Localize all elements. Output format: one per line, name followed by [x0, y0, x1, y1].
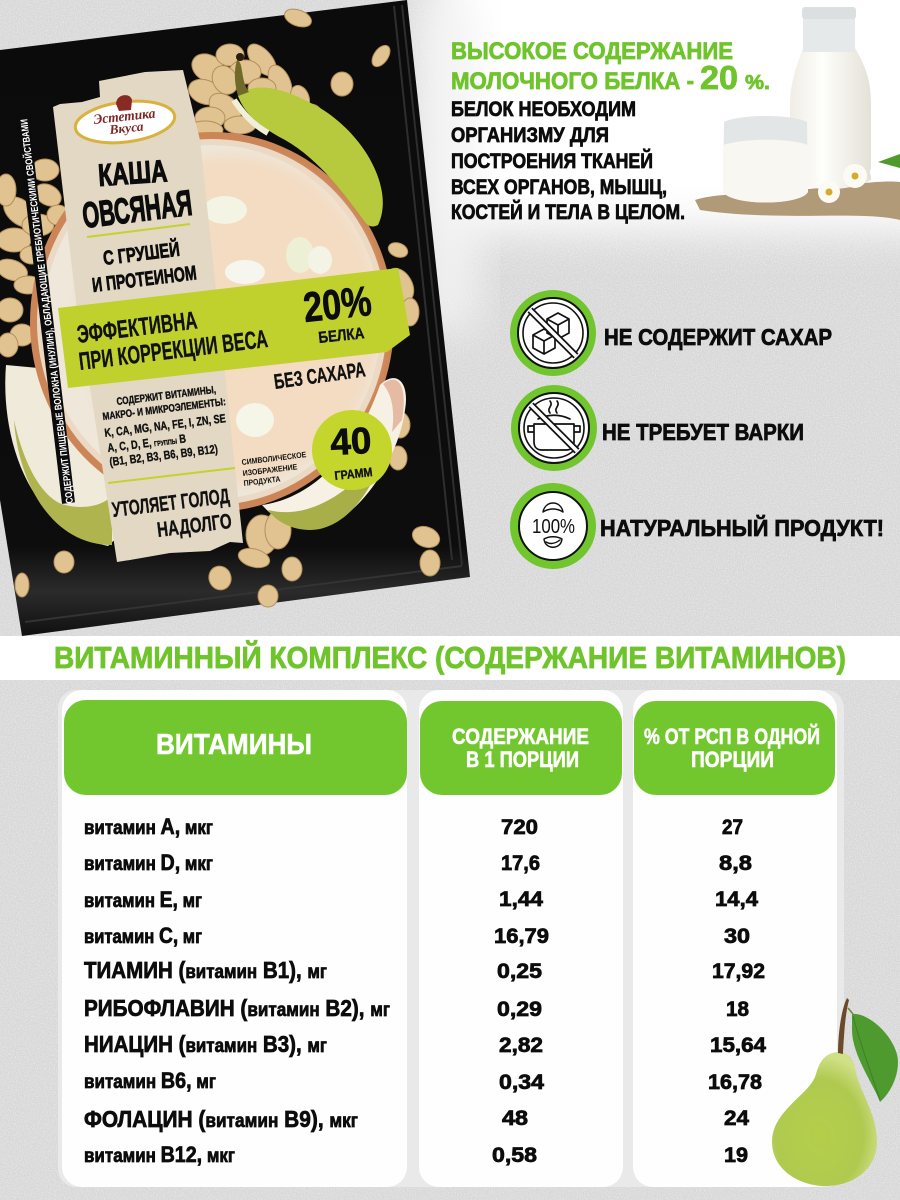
brand logo: Вкуса [108, 118, 145, 137]
percent of daily value values: 17,92 [712, 960, 765, 983]
protein body text: ОРГАНИЗМУ ДЛЯ [451, 124, 609, 147]
product name: И ПРОТЕИНОМ [91, 262, 198, 297]
header: amount per serving: СОДЕРЖАНИЕ [452, 724, 589, 749]
burlap [695, 182, 900, 220]
protein heading: ВЫСОКОЕ СОДЕРЖАНИЕ [451, 38, 733, 65]
pear slices [234, 53, 406, 530]
amount per serving values: 1,44 [499, 888, 543, 911]
header: amount per serving [420, 701, 622, 795]
vitamin names column: РИБОФЛАВИН (витамин В2), мг [84, 995, 390, 1021]
amount per serving values: 16,79 [494, 925, 549, 948]
feature labels: НАТУРАЛЬНЫЙ ПРОДУКТ! [600, 514, 884, 541]
oat pack product photo [0, 0, 470, 636]
vitamins note on pack: A, C, D, E, ГРУППЫ B [107, 431, 187, 455]
vitamin names column: ТИАМИН (витамин В1), мг [84, 957, 327, 983]
symbolic image note [242, 452, 306, 486]
brand logo [73, 95, 177, 148]
left pear slice [5, 365, 125, 546]
vitamin names column: НИАЦИН (витамин В3), мг [84, 1031, 327, 1057]
vitamins note on pack: (B1, B2, B3, B6, B9, B12) [109, 442, 219, 469]
product name [82, 160, 197, 292]
protein heading: МОЛОЧНОГО БЕЛКА - [451, 68, 694, 95]
weight badge [312, 410, 392, 490]
percent of daily value values: 18 [726, 998, 749, 1021]
percent of daily value values: 19 [724, 1144, 748, 1167]
vitamin names column: витамин D, мкг [84, 850, 213, 875]
bowl with porridge [30, 132, 394, 512]
brand logo: Эстетика [93, 107, 156, 128]
vitamin names column: ФОЛАЦИН (витамин В9), мкг [84, 1106, 358, 1132]
amount per serving values: 0,58 [492, 1144, 537, 1167]
protein body text: ПОСТРОЕНИЯ ТКАНЕЙ [451, 149, 653, 173]
table backing [58, 690, 844, 1187]
vitamin names column: витамин Е, мг [84, 887, 202, 912]
vitamin table [58, 690, 844, 1187]
symbolic image note: ИЗОБРАЖЕНИЕ [242, 462, 298, 478]
amount per serving values: 48 [502, 1107, 528, 1130]
symbolic image note: ПРОДУКТА [243, 475, 281, 488]
icon: no sugar [510, 290, 596, 376]
icon: 100 percent natural: 100% [532, 516, 575, 538]
flowers and leaf [818, 154, 900, 203]
scattered oat flakes [15, 6, 443, 607]
product name: С ГРУШЕЙ [102, 237, 181, 270]
milk photo [695, 7, 900, 220]
feature labels: НЕ ТРЕБУЕТ ВАРКИ [602, 419, 804, 445]
product name: КАША [97, 153, 168, 193]
vitamins note on pack: K, CA, MG, NA, FE, I, ZN, SE [104, 411, 226, 440]
vitamin names column: витамин С, мг [84, 923, 202, 948]
vitamin names column: витамин В6, мг [84, 1068, 216, 1093]
amount per serving values: 720 [501, 816, 538, 839]
symbolic image note: СИМВОЛИЧЕСКОЕ [241, 450, 307, 467]
vertical pack text: СОДЕРЖИТ ПИЩЕВЫЕ ВОЛОКНА (ИНУЛИН), ОБЛАДАЮЩИЕ ПРЕБИОТИЧЕСКИМИ СВОЙСТВАМИ [17, 118, 76, 504]
header: vitamins [64, 700, 407, 795]
percent of daily value values: 14,4 [715, 888, 758, 911]
percent of daily value values: 30 [724, 925, 750, 948]
protein heading: 20 [700, 59, 738, 96]
header: percent of daily value: ПОРЦИИ [691, 747, 774, 772]
protein heading [451, 38, 770, 96]
header: percent of daily value [634, 701, 835, 795]
beige label [53, 70, 243, 562]
vitamins note on pack: МАКРО- И МИКРОЭЛЕМЕНТЫ: [102, 396, 226, 423]
protein body text [451, 98, 685, 224]
pear photo [772, 998, 898, 1186]
lime claim band [58, 268, 410, 388]
percent of daily value values: 27 [722, 816, 743, 839]
percent of daily value values: 8,8 [719, 852, 752, 875]
milk bottle [790, 7, 871, 189]
lime claim band: ЭФФЕКТИВНА [75, 306, 199, 349]
protein heading: %. [745, 72, 770, 94]
header: vitamins: ВИТАМИНЫ [156, 729, 312, 761]
percent of daily value values: 15,64 [710, 1034, 766, 1057]
vitamin names column: витамин А, мкг [84, 814, 213, 839]
icon: no cooking [511, 385, 597, 471]
no sugar note: БЕЗ САХАРА [272, 358, 367, 394]
amount per serving values: 2,82 [499, 1034, 543, 1057]
satiety claim: НАДОЛГО [156, 510, 233, 542]
header: percent of daily value: % ОТ РСП В ОДНОЙ [644, 724, 820, 749]
vitamins note on pack: СОДЕРЖИТ ВИТАМИНЫ, [116, 384, 217, 408]
header: amount per serving: В 1 ПОРЦИИ [466, 747, 579, 772]
lime claim band: ПРИ КОРРЕКЦИИ ВЕСА [77, 325, 269, 376]
weight badge: ГРАММ [334, 465, 373, 483]
oat flakes cluster behind bowl [0, 39, 419, 571]
vitamin names column [84, 814, 390, 1167]
amount per serving values: 0,29 [497, 998, 542, 1021]
vitamin names column: витамин В12, мкг [84, 1142, 235, 1167]
percent of daily value values: 24 [724, 1107, 749, 1130]
weight badge: 40 [329, 420, 372, 463]
percent of daily value values: 16,78 [708, 1071, 762, 1094]
satiety claim [111, 488, 232, 539]
amount per serving values: 0,25 [497, 960, 542, 983]
amount per serving values [492, 816, 549, 1167]
icon: 100 percent natural [510, 483, 596, 569]
lime claim band: БЕЛКА [318, 325, 366, 347]
pack body [0, 0, 470, 636]
satiety claim: УТОЛЯЕТ ГОЛОД [111, 485, 231, 522]
vitamins note on pack [102, 384, 235, 483]
protein body text: КОСТЕЙ И ТЕЛА В ЦЕЛОМ. [451, 200, 685, 224]
feature labels: НЕ СОДЕРЖИТ САХАР [604, 324, 832, 350]
amount per serving values: 0,34 [499, 1071, 544, 1094]
glass of milk [723, 116, 808, 202]
feature labels [600, 324, 884, 541]
percent of daily value values [708, 816, 766, 1167]
protein body text: ВСЕХ ОРГАНОВ, МЫШЦ, [451, 176, 667, 199]
product name: ОВСЯНАЯ [80, 182, 194, 236]
protein body text: БЕЛОК НЕОБХОДИМ [451, 98, 636, 121]
amount per serving values: 17,6 [501, 852, 540, 875]
lime claim band: 20% [301, 277, 374, 331]
